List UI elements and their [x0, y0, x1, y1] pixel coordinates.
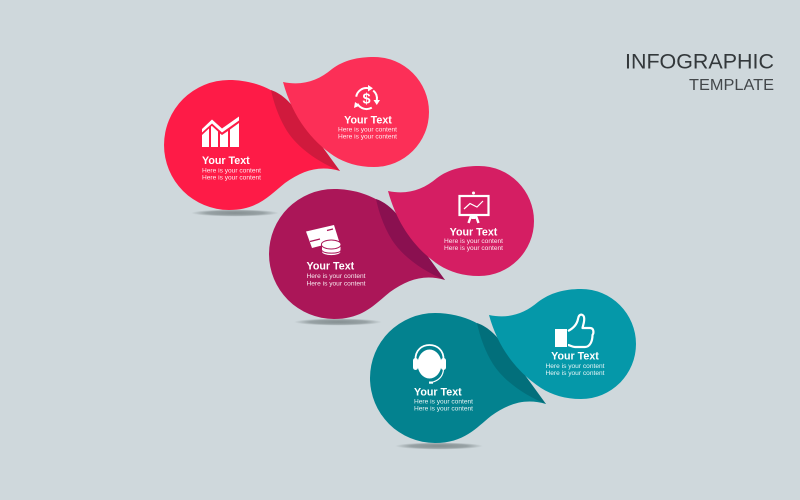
title: TEMPLATE [689, 77, 774, 94]
fold: magenta [376, 199, 445, 280]
fold: teal [477, 323, 546, 404]
drop: teal left [370, 313, 546, 443]
text: teal right: Here is your content [545, 370, 605, 377]
fold: red [271, 90, 340, 171]
text: magenta right [444, 226, 503, 252]
drop: teal right [489, 289, 636, 399]
text: teal left: Here is your content [414, 398, 473, 406]
icon: headset [413, 345, 446, 384]
icon: growth chart [202, 116, 239, 147]
text: red right: Here is your content [338, 134, 397, 140]
drop: magenta right [388, 166, 534, 276]
title [625, 50, 774, 94]
icon: thumbs up [555, 315, 593, 347]
drop: red right [283, 57, 429, 167]
shadow: teal drop [395, 442, 483, 450]
text: red right [338, 114, 397, 140]
panel: magenta pair [269, 166, 534, 326]
text: red right: Here is your content [338, 127, 397, 134]
text: red left: Your Text [202, 155, 250, 167]
icon: dollar cycle: $ [362, 92, 371, 108]
shadow: magenta drop [294, 318, 382, 326]
text: magenta left: Your Text [306, 260, 355, 272]
text: magenta left: Here is your content [306, 273, 366, 280]
text: teal left [414, 386, 473, 412]
shadow: red drop [191, 210, 279, 216]
text: red right: Your Text [344, 114, 392, 126]
panel: teal pair [370, 289, 636, 450]
text: red left: Here is your content [202, 174, 261, 182]
text: teal right [545, 350, 605, 377]
text: red left [202, 155, 261, 182]
text: magenta left: Here is your content [306, 280, 366, 288]
icon: card and coins [306, 225, 341, 256]
icon: presentation board [460, 192, 488, 223]
text: teal right: Here is your content [545, 363, 605, 370]
text: magenta right: Here is your content [444, 245, 503, 252]
panel: red pair [164, 57, 429, 216]
drop: red left [164, 80, 340, 210]
text: teal left: Your Text [414, 386, 462, 398]
icon: dollar cycle [354, 85, 380, 109]
text: magenta left [306, 260, 366, 288]
text: magenta right: Here is your content [444, 238, 503, 245]
title: INFOGRAPHIC [625, 50, 774, 74]
text: teal left: Here is your content [414, 406, 473, 412]
text: red left: Here is your content [202, 168, 261, 174]
drop: magenta left [269, 189, 445, 319]
text: teal right: Your Text [551, 350, 599, 362]
text: magenta right: Your Text [450, 226, 498, 238]
